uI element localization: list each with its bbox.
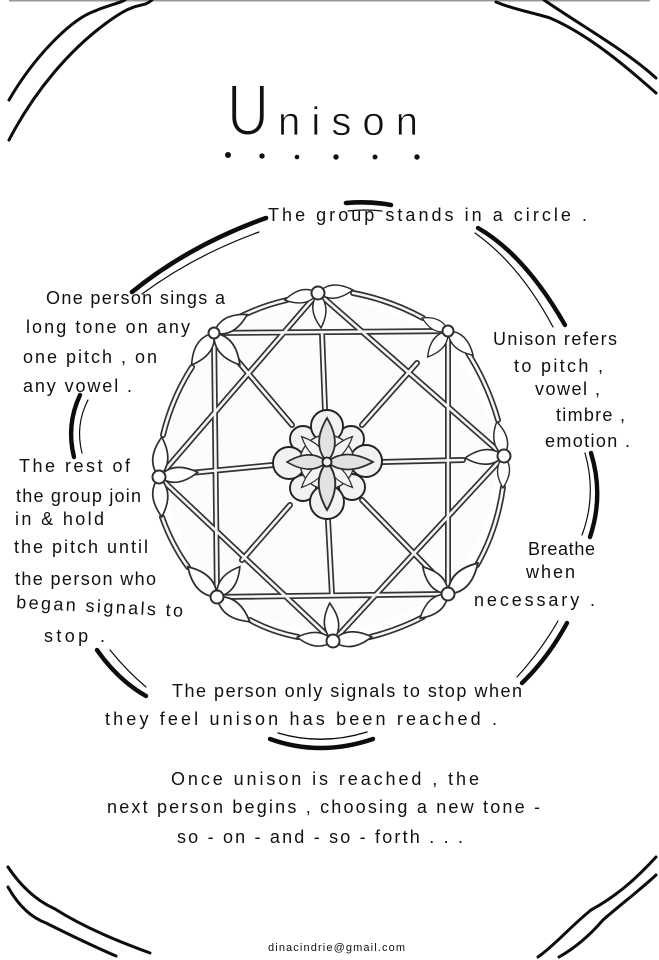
- top edge line: [9, 0, 650, 2]
- text block: unison refers to: emotion .: [545, 431, 630, 451]
- text block: one person sings: One person sings a: [46, 288, 226, 308]
- text block: unison refers to: [493, 329, 630, 451]
- text block: unison refers to: Unison refers: [493, 329, 617, 349]
- petals at the nodes: [152, 283, 510, 648]
- text block: one person sings: [23, 288, 226, 396]
- double-line squares, spokes and ring: [159, 293, 504, 641]
- text block: the rest of the group: in & hold: [15, 509, 104, 529]
- text block: once unison is reached: Once unison is reached , the: [171, 769, 479, 789]
- text block: one person sings: long tone on any: [26, 317, 190, 337]
- title: [227, 71, 418, 151]
- text block: once unison is reached: [107, 769, 540, 847]
- text block: the rest of the group: stop .: [44, 626, 105, 646]
- central flower: [273, 410, 382, 519]
- text block: the rest of the group: began signals to: [16, 592, 184, 621]
- text block: breathe when necessary: when: [525, 562, 575, 582]
- text block: unison refers to: vowel ,: [535, 379, 600, 399]
- text block: the person only signals: [105, 681, 522, 729]
- text block: the person only signals: they feel unison has been reached .: [105, 709, 497, 729]
- text block: the rest of the group: the pitch until: [14, 537, 148, 557]
- text block: unison refers to: to pitch ,: [514, 356, 603, 376]
- text block: the rest of the group: the group join: [16, 486, 141, 506]
- text block: the person only signals: The person only signals to stop when: [172, 681, 522, 701]
- text block: one person sings: any vowel .: [23, 376, 132, 396]
- text: the group stands in a circle: The group stands in a circle .: [268, 205, 587, 225]
- text block: breathe when necessary: [474, 539, 595, 610]
- text block: breathe when necessary: necessary .: [474, 590, 595, 610]
- title: nison: [278, 100, 418, 144]
- node circles: [152, 286, 510, 648]
- title: U: [227, 71, 269, 151]
- text block: once unison is reached: next person begins , choosing a new tone -: [107, 797, 540, 817]
- text block: one person sings: one pitch , on: [23, 347, 157, 367]
- text block: breathe when necessary: Breathe: [528, 539, 595, 559]
- text block: once unison is reached: so - on - and - so - forth . . .: [177, 827, 463, 847]
- text block: the rest of the group: [14, 456, 184, 646]
- contact email: dinacindrie@gmail.com: [268, 942, 405, 954]
- title dots: [225, 152, 420, 160]
- ring of thick and thin arcs: [71, 202, 597, 748]
- text block: the rest of the group: the person who: [15, 569, 156, 589]
- text block: the rest of the group: The rest of: [19, 456, 131, 476]
- mandala circle diagram: [152, 283, 511, 648]
- text block: unison refers to: timbre ,: [556, 405, 625, 425]
